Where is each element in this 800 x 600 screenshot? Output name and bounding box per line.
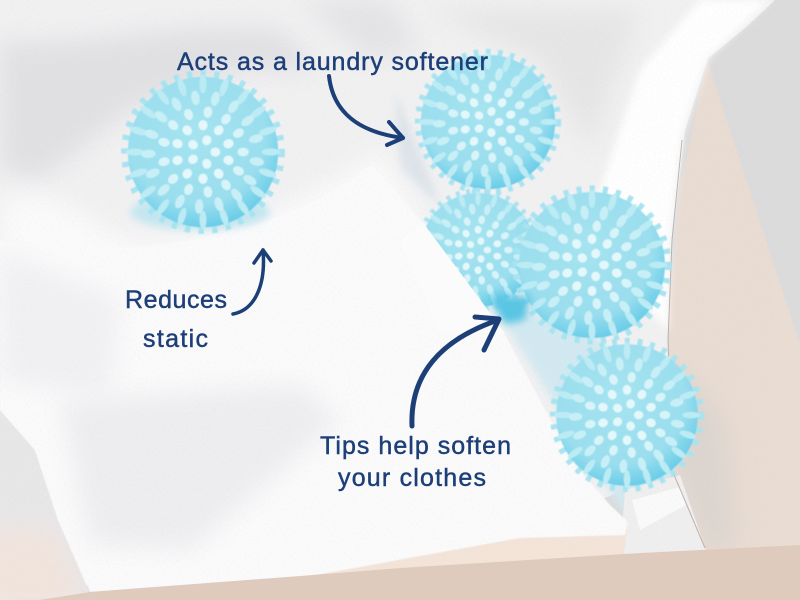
ball shadow on towel (130, 194, 270, 230)
label: your clothes: your clothes (338, 464, 486, 492)
dryer ball middle behind (420, 192, 536, 308)
left towel mid shading (0, 250, 120, 400)
basket side shading (672, 360, 735, 550)
dryer ball fourth (517, 190, 667, 340)
label: reduces: Reduces (125, 286, 227, 314)
small folded towels under the balls (620, 475, 706, 556)
label: acts as a laundry softener: Acts as a laundry softener (177, 48, 488, 76)
basket front rim (40, 545, 800, 600)
centre towel grey shading (300, 0, 420, 60)
arrow: to left ball (233, 250, 271, 314)
arrow: to top ball (329, 76, 403, 145)
dryer ball bottom (554, 342, 700, 488)
label: tips help soften: Tips help soften (320, 432, 511, 460)
shadow side of the upper towel by the balls (395, 90, 440, 205)
front towel (0, 165, 628, 592)
basket crease (668, 140, 705, 548)
cyan shadow near the arrow tip (488, 296, 530, 324)
front towel fold shading (60, 385, 340, 550)
basket inner side panel (668, 60, 800, 560)
arrow: to ball tips (412, 317, 499, 426)
peach lining under the front towel (300, 520, 628, 575)
label: static: static (143, 325, 208, 353)
bright towel band (0, 150, 425, 320)
lower-left towel (0, 410, 90, 600)
front towel edge covering middle ball (400, 224, 505, 333)
shadowed blue towel under the balls (490, 300, 680, 515)
left towel grey shading (0, 28, 320, 180)
upper towel bright fold (590, 0, 770, 330)
lower-left peach tint (0, 530, 85, 600)
upper towel grey area (430, 10, 640, 150)
dryer ball top right (419, 53, 557, 191)
dryer ball left (126, 75, 280, 229)
